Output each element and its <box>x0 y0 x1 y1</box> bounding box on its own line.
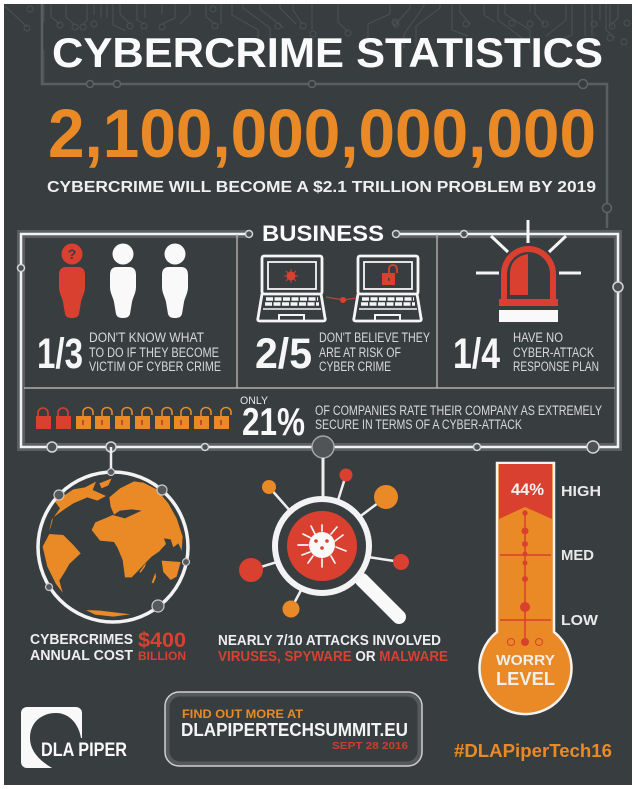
heading: business: BUSINESS <box>262 221 384 246</box>
headline number: 2,100,000,000,000 <box>48 95 596 172</box>
stat: two fifths: 2/5 <box>255 330 312 378</box>
stat: 21 percent: 21% <box>242 401 305 444</box>
icon: laptops <box>258 256 421 321</box>
caption: attacks <box>218 633 448 665</box>
text: one quarter <box>513 330 599 374</box>
text: one third <box>89 330 221 374</box>
chart: worry level thermometer <box>479 463 601 714</box>
text: one third: DON'T KNOW WHAT <box>89 330 204 345</box>
icon: padlocks <box>36 408 231 429</box>
icon: three people <box>59 244 188 318</box>
stat: one quarter: 1/4 <box>453 330 500 378</box>
callout: find out more: DLAPIPERTECHSUMMIT.EU <box>181 719 408 740</box>
caption: annual cost: ANNUAL COST <box>30 648 133 664</box>
text: one quarter: HAVE NO <box>513 330 563 345</box>
caption: attacks: NEARLY 7/10 ATTACKS INVOLVED <box>218 633 441 649</box>
logo: DLA Piper: DLA PIPER <box>41 740 127 761</box>
caption: attacks: VIRUSES, SPYWARE OR MALWARE <box>218 649 448 665</box>
text: two fifths: DON'T BELIEVE THEY <box>319 330 430 345</box>
text: one quarter: RESPONSE PLAN <box>513 359 599 374</box>
scale labels: LOW <box>561 612 599 629</box>
label: only: ONLY <box>240 395 269 407</box>
bulb label: LEVEL <box>496 669 555 689</box>
title: CYBERCRIME STATISTICS <box>52 29 603 76</box>
subtitle: CYBERCRIME WILL BECOME A $2.1 TRILLION PROBLEM BY 2019 <box>47 179 596 196</box>
text: one third: VICTIM OF CYBER CRIME <box>89 359 221 374</box>
hashtag: #DLAPiperTech16 <box>454 741 612 761</box>
scale labels: HIGH <box>561 483 601 500</box>
scale labels <box>561 483 601 629</box>
text: secure companies <box>315 403 602 432</box>
scale labels: MED <box>561 547 594 564</box>
frame nodes <box>18 230 623 458</box>
icon: siren <box>476 220 581 322</box>
callout: find out more <box>165 692 422 766</box>
caption: annual cost: $400 <box>138 629 186 652</box>
text: two fifths: CYBER CRIME <box>319 359 391 374</box>
bulb label: WORRY <box>496 652 555 669</box>
stat: one third: 1/3 <box>37 330 83 378</box>
callout: find out more: FIND OUT MORE AT <box>182 709 303 721</box>
bulb label <box>496 652 555 689</box>
icon: globe <box>38 447 190 622</box>
text: secure companies: SECURE IN TERMS OF A CYBER-ATTACK <box>315 417 522 432</box>
icon: magnifier and virus <box>239 458 409 618</box>
text: one third: TO DO IF THEY BECOME <box>89 345 219 360</box>
callout: find out more: SEPT 28 2016 <box>332 740 408 752</box>
logo: DLA Piper <box>21 707 127 768</box>
value: 44 percent: 44% <box>511 480 544 499</box>
caption: annual cost: BILLION <box>138 649 186 663</box>
text: one quarter: CYBER-ATTACK <box>513 345 594 360</box>
icon: three people: ? <box>68 246 76 262</box>
text: two fifths <box>319 330 430 374</box>
caption: annual cost <box>30 629 186 664</box>
panel: business <box>18 220 623 458</box>
text: two fifths: ARE AT RISK OF <box>319 345 401 360</box>
caption: annual cost: CYBERCRIMES <box>30 632 133 648</box>
